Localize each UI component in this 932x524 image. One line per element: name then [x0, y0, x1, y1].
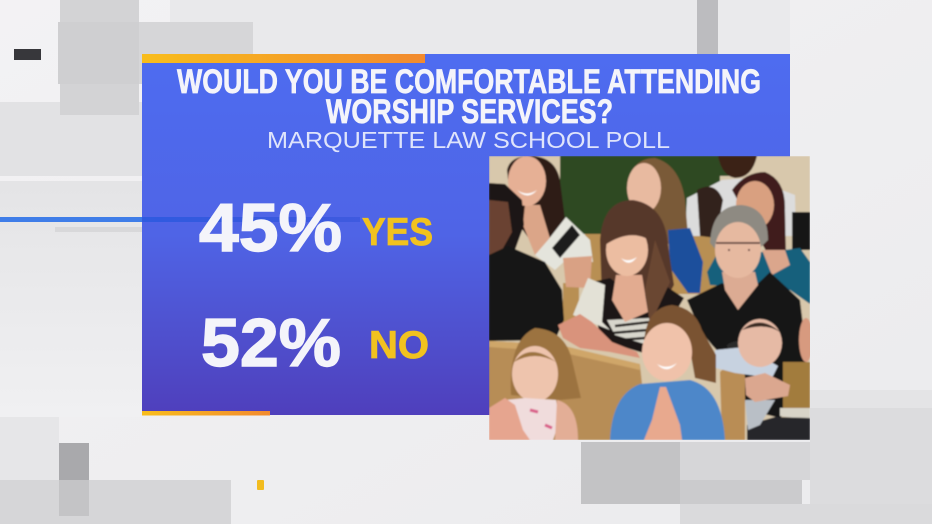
stat: 45% yes: 45%	[199, 190, 342, 266]
stat: 45% yes	[199, 190, 433, 266]
girl in blue	[644, 305, 716, 383]
far right dark shape	[792, 212, 810, 250]
woman back centre	[636, 157, 688, 244]
baby	[715, 347, 778, 378]
orange accent bar top	[142, 54, 425, 63]
dark dash marker	[14, 49, 41, 60]
title: WOULD YOU BE COMFORTABLE ATTENDING	[177, 63, 761, 101]
stat: 52% no: 52%	[201, 305, 341, 381]
grandmother	[687, 272, 806, 418]
panel: poll question	[142, 54, 790, 416]
title: WORSHIP SERVICES?	[326, 93, 613, 131]
front pew	[489, 341, 648, 440]
orange accent bar bottom	[142, 411, 270, 416]
woman back right	[732, 172, 786, 258]
man left	[489, 183, 524, 256]
photo: congregation in church pews	[489, 156, 813, 440]
woman top left	[506, 156, 565, 238]
stat: 52% no: NO	[369, 324, 429, 367]
hand at right edge	[799, 318, 813, 362]
clapping hands	[558, 314, 640, 358]
back row man	[718, 156, 757, 178]
stat: 52% no	[201, 305, 429, 381]
pew backs, back row	[585, 234, 720, 294]
girl in pink	[511, 328, 581, 400]
blue line	[0, 217, 360, 222]
yellow dash marker	[257, 480, 264, 490]
stat: 45% yes: YES	[362, 211, 433, 254]
pew end	[720, 364, 745, 440]
centre woman hair	[599, 199, 674, 296]
centre woman face	[612, 275, 648, 322]
wall and green panel	[489, 156, 810, 440]
title	[177, 63, 761, 131]
subtitle: MARQUETTE LAW SCHOOL POLL	[267, 127, 670, 153]
centre woman clothes	[592, 278, 684, 356]
